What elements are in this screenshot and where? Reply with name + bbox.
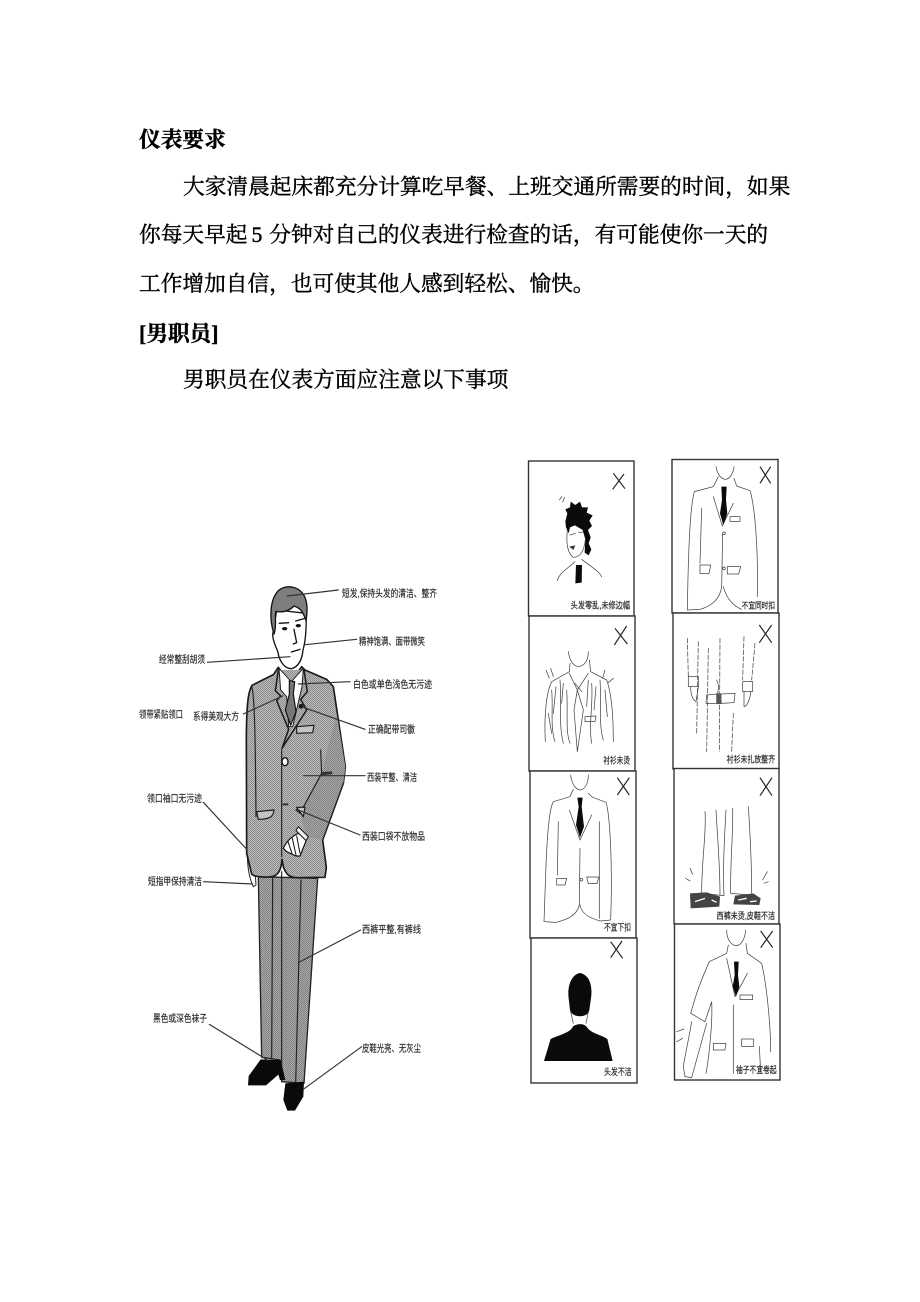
figure callout labels: 正确配带司徽 <box>368 723 415 736</box>
panel: messy hair: 头发零乱,未修边幅 <box>571 599 630 610</box>
right hand <box>283 827 308 856</box>
panel: shirt untucked <box>673 613 779 769</box>
trousers <box>258 872 318 1083</box>
panel: shirt untucked: 衬衫未扎放整齐 <box>727 754 775 765</box>
panel: bottom button fastened <box>530 771 636 938</box>
illustration: correct male staff figure <box>203 587 365 1111</box>
panel: sleeves rolled up: 袖子不宜卷起 <box>736 1064 777 1075</box>
figure callout labels: 西装口袋不放物品 <box>362 830 425 843</box>
figure callout labels <box>139 587 437 1055</box>
figure callout labels: 领口袖口无污迹 <box>147 792 202 805</box>
panel: sleeves rolled up <box>674 924 780 1080</box>
panel: dirty hair, back view: 头发不洁 <box>604 1066 632 1077</box>
left hand <box>247 853 256 887</box>
figure callout labels: 精神饱满、面带微笑 <box>359 635 425 648</box>
intro paragraph: 大家清晨起床都充分计算吃早餐、上班交通所需要的时间，如果 <box>183 175 790 199</box>
panel: unpressed trousers, dirty shoes: 西裤未烫,皮鞋不洁 <box>717 910 775 921</box>
figure callout labels: 系得美观大方 <box>193 710 239 723</box>
figure callout labels: 白色或单色浅色无污迹 <box>353 678 432 691</box>
intro paragraph: 你每天早起5 分钟对自己的仪表进行检查的话，有可能使你一天的 <box>139 223 768 247</box>
figure callout labels: 西裤平整,有裤线 <box>362 923 421 936</box>
intro paragraph <box>139 175 790 296</box>
figure callout labels: 短指甲保持清洁 <box>148 875 202 888</box>
figure callout labels: 短发,保持头发的清洁、整齐 <box>342 587 437 600</box>
leader lines <box>203 590 365 1089</box>
panel: messy hair <box>528 461 634 616</box>
heading: appearance requirements: 仪表要求 <box>139 128 226 152</box>
head <box>271 587 307 669</box>
figure callout labels: 领带紧贴领口 <box>139 708 183 721</box>
suit jacket <box>246 667 345 878</box>
intro paragraph: 工作增加自信，也可使其他人感到轻松、愉快。 <box>139 272 594 296</box>
subheading: male staff: [男职员] <box>139 322 219 346</box>
shirt and tie <box>279 668 303 727</box>
lead-in sentence: 男职员在仪表方面应注意以下事项 <box>183 368 508 392</box>
figure callout labels: 黑色或深色袜子 <box>153 1012 207 1025</box>
panel: dirty hair, back view <box>531 938 637 1083</box>
figure callout labels: 西装平整、清洁 <box>367 771 417 784</box>
panel: both buttons fastened: 不宜同时扣 <box>742 600 775 611</box>
panel: unpressed trousers, dirty shoes <box>674 768 779 924</box>
panel: both buttons fastened <box>672 460 778 613</box>
figure callout labels: 皮鞋光亮、无灰尘 <box>362 1042 421 1055</box>
shoes <box>248 1059 304 1111</box>
figure callout labels: 经常整刮胡须 <box>159 653 205 666</box>
panel: bottom button fastened: 不宜下扣 <box>604 922 631 933</box>
panel: wrinkled shirt: 衬衫未烫 <box>603 754 630 765</box>
panel: wrinkled shirt <box>529 616 635 771</box>
